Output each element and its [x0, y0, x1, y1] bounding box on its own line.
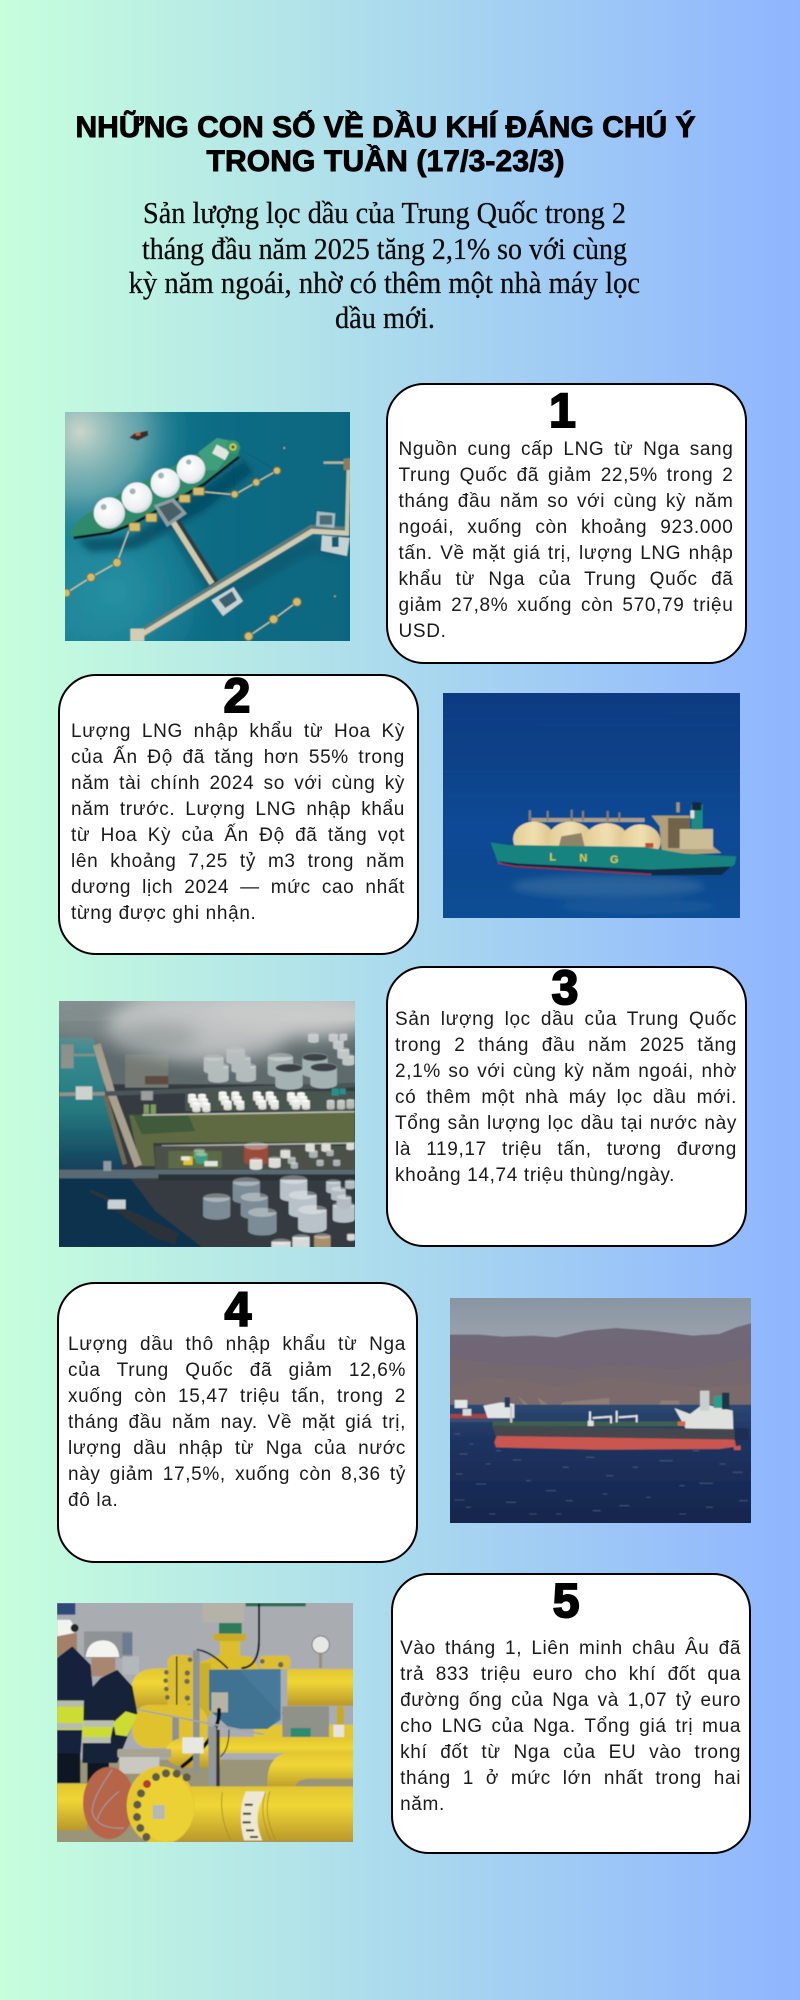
- flow meter: [117, 1749, 171, 1758]
- superstructure: [651, 816, 721, 855]
- text: fact 3: là 119,17 triệu tấn, tương đương: [395, 1139, 737, 1160]
- text: fact 1: USD.: [398, 621, 446, 642]
- worker 2: [91, 1657, 115, 1677]
- text: fact 5: năm.: [400, 1794, 445, 1815]
- wall: [54, 1600, 354, 1843]
- image: LNG tanker at jetty, aerial: [65, 412, 350, 641]
- text: fact 2: của Ấn Độ đã tăng hơn 55% trong: [71, 747, 405, 768]
- number 4: 4: [225, 1284, 251, 1337]
- green field: [129, 1113, 355, 1166]
- blue actuator box: [209, 1669, 281, 1729]
- bolts: [163, 1658, 288, 1716]
- text: fact 5: tháng 1 ở mức lớn nhất trong hai: [400, 1768, 741, 1789]
- text: fact 2: dương lịch 2024 — mức cao nhất: [71, 877, 405, 898]
- text: fact 5: trả 833 triệu euro cho khí đốt qua: [400, 1664, 741, 1685]
- text: fact 4: Lượng dầu thô nhập khẩu từ Nga: [68, 1334, 406, 1355]
- tanker: [113, 1208, 178, 1245]
- main ship superstructure: [674, 1404, 733, 1429]
- sea glints: [454, 1434, 748, 1514]
- text: fact 3: trong 2 tháng đầu năm 2025 tăng: [395, 1035, 737, 1056]
- domes: [513, 822, 554, 857]
- ship hull: [68, 438, 240, 538]
- image: oil tanker near coast: [450, 1298, 751, 1523]
- ship shadow: [77, 460, 253, 552]
- text: fact 3: khoảng 14,74 triệu thùng/ngày.: [395, 1165, 675, 1186]
- subtitle: tháng đầu năm 2025 tăng 2,1% so với cùng: [142, 231, 627, 266]
- pipe rack: [59, 1170, 355, 1179]
- number 1: 1: [549, 385, 576, 438]
- text: fact 1: tấn. Về mặt giá trị, lượng LNG nhập: [398, 543, 734, 564]
- text: fact 4: của Trung Quốc đã giảm 12,6%: [68, 1360, 406, 1381]
- middle tanks: [194, 1149, 205, 1160]
- cables: [182, 1605, 259, 1767]
- title: NHỮNG CON SỐ VỀ DẦU KHÍ ĐÁNG CHÚ Ý: [76, 110, 696, 144]
- sign: [182, 1738, 204, 1754]
- title: TRONG TUẦN (17/3-23/3): [206, 144, 564, 178]
- platforms: [153, 498, 187, 527]
- subtitle: dầu mới.: [335, 300, 435, 335]
- upper land: [55, 998, 358, 1085]
- text: fact 2: từ Hoa Kỳ của Ấn Độ đã tăng vọt: [71, 825, 405, 846]
- text: fact 5: Vào tháng 1, Liên minh châu Âu đã: [400, 1638, 741, 1659]
- number 5: 5: [553, 1575, 579, 1628]
- subtitle: kỳ năm ngoái, nhờ có thêm một nhà máy lọc: [129, 265, 640, 300]
- hull lettering: [549, 852, 619, 866]
- text: fact 4: lượng dầu nhập từ Nga của nước: [68, 1438, 406, 1459]
- deck and cranes: [493, 1421, 678, 1426]
- panel: fact 2: [58, 674, 419, 955]
- gauge: [319, 1653, 322, 1668]
- text: fact 3: có thêm một nhà máy lọc dầu mới.: [395, 1087, 737, 1108]
- road and embankment: [97, 1045, 138, 1166]
- fog: [55, 998, 358, 1021]
- mooring lines: [66, 470, 297, 636]
- text: fact 1: giảm 27,8% xuống còn 570,79 triệu: [398, 595, 734, 616]
- text: fact 3: 2,1% so với cùng kỳ năm ngoái, nhờ: [395, 1061, 737, 1082]
- panel: fact 4: [56, 1282, 418, 1563]
- text: fact 4: này giảm 17,5%, xuống còn 8,36 tỷ: [68, 1464, 406, 1485]
- dolphins: [62, 467, 301, 640]
- subtitle: [129, 195, 640, 335]
- worker 1: [57, 1633, 77, 1657]
- title: [76, 110, 696, 178]
- text: fact 4: đô la.: [68, 1490, 118, 1511]
- reflection: [511, 875, 705, 898]
- image: LNG carrier at sea: [443, 693, 740, 918]
- water: [59, 1038, 123, 1170]
- text: fact 3: Sản lượng lọc dầu của Trung Quốc: [395, 1009, 737, 1030]
- upper tanks under fog: [204, 1047, 256, 1083]
- number 2: 2: [224, 670, 250, 723]
- hull: [491, 843, 736, 875]
- spheres: [93, 497, 125, 528]
- text: fact 4: [68, 1334, 406, 1511]
- text: fact 1: ngoái, xuống còn khoảng 923.000: [398, 517, 734, 538]
- text: fact 5: đường ống của Nga và 1,07 tỷ euro: [400, 1690, 741, 1711]
- handrail: [70, 1697, 96, 1767]
- text: fact 5: [400, 1637, 741, 1815]
- upper pipe: [287, 1669, 354, 1706]
- text: fact 2: năm trước. Lượng LNG nhập khẩu: [71, 799, 405, 820]
- posts: [193, 1651, 200, 1772]
- text: fact 2: lên khoảng 7,25 tỷ m3 trong năm: [71, 851, 405, 872]
- text: fact 1: khẩu từ Nga của Trung Quốc đã: [398, 569, 734, 590]
- text: fact 3: Tổng sản lượng lọc dầu tại nước này: [395, 1113, 737, 1134]
- mid pipes: [132, 1705, 207, 1748]
- number 3: 3: [552, 962, 578, 1015]
- hull lettering: N: [579, 853, 587, 865]
- tug boat: [129, 430, 148, 440]
- subtitle: Sản lượng lọc dầu của Trung Quốc trong 2: [143, 195, 626, 230]
- panel: fact 3: [386, 966, 746, 1247]
- text: fact 2: Lượng LNG nhập khẩu từ Hoa Kỳ: [71, 721, 405, 742]
- hull: [492, 1426, 749, 1442]
- text: fact 2: từng được ghi nhận.: [71, 903, 256, 924]
- hull lettering: L: [549, 852, 556, 864]
- text: fact 1: tháng đầu năm so với cùng kỳ năm: [398, 491, 734, 512]
- text: fact 1: [398, 439, 734, 642]
- text: fact 1: Trung Quốc đã giảm 22,5% trong 2: [398, 465, 734, 486]
- text: fact 2: năm tài chính 2024 so với cùng kỳ: [71, 773, 405, 794]
- white tanks rows: [188, 1094, 196, 1104]
- image: refinery tank farm, aerial: [59, 1001, 355, 1247]
- text: fact 5: khí đốt từ Nga của EU vào trong: [400, 1742, 741, 1763]
- image: yellow gas pipes and workers: [57, 1603, 353, 1842]
- hull lettering: G: [610, 854, 619, 866]
- text: fact 1: Nguồn cung cấp LNG từ Nga sang: [398, 439, 734, 460]
- text: fact 2: [71, 721, 405, 924]
- text: fact 3: [395, 1009, 737, 1186]
- panel: fact 5: [391, 1573, 751, 1854]
- text: fact 4: xuống còn 15,47 triệu tấn, trong 2: [68, 1386, 406, 1407]
- panel: fact 1: [386, 383, 746, 664]
- text: fact 5: cho LNG của Nga. Tổng giá trị mua: [400, 1716, 741, 1737]
- jetty: [138, 458, 349, 636]
- main pipe: [57, 1784, 87, 1831]
- distant ship: [450, 1414, 513, 1421]
- lower big tanks: [203, 1178, 277, 1236]
- jetty left: [61, 1045, 74, 1069]
- deck equipment: [531, 818, 645, 822]
- bays: [155, 1146, 355, 1170]
- text: fact 4: tháng đầu năm nay. Về mặt giá trị,: [68, 1412, 406, 1433]
- pipe band: [241, 1792, 267, 1841]
